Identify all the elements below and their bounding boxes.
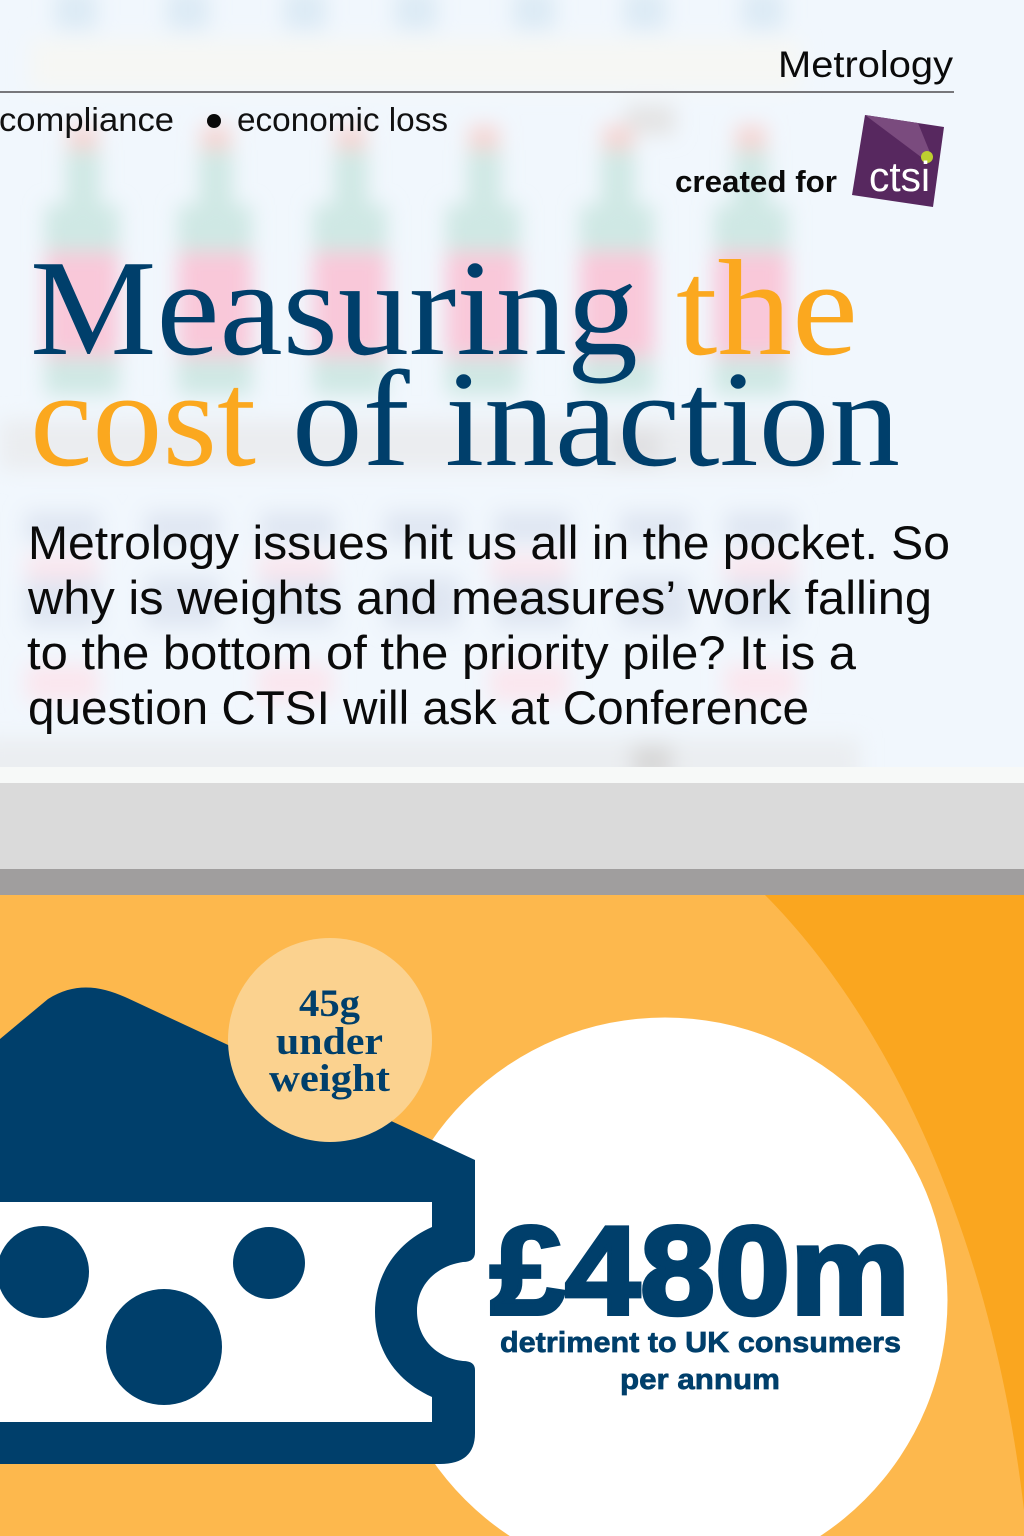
icon: CTSI logo [852, 115, 944, 207]
white separator band [0, 767, 1024, 783]
dark grey band [0, 869, 1024, 895]
created for label: created for [675, 164, 837, 199]
badge: 45g under weight: under [276, 1020, 383, 1063]
title: of inaction [292, 343, 900, 495]
intro paragraph [27, 516, 950, 734]
topic tag: compliance: compliance [0, 101, 174, 138]
badge: 45g under weight: weight [269, 1057, 390, 1100]
stat caption [500, 1327, 901, 1396]
header rule [0, 91, 954, 93]
title: cost [30, 343, 256, 495]
icon: cheese wedge [0, 987, 475, 1464]
stat caption: per annum [620, 1364, 780, 1396]
darker orange curved area [765, 895, 1024, 1510]
stat: £480m: £480m [490, 1200, 910, 1341]
title [30, 232, 900, 495]
badge: 45g under weight: 45g [299, 982, 361, 1025]
hero background: blurred bottles [0, 0, 855, 767]
title: the [676, 232, 858, 384]
icon: CTSI logo: ctsi [869, 153, 930, 200]
title: Measuring [30, 232, 638, 384]
intro paragraph: Metrology issues hit us all in the pocket. So [28, 516, 950, 569]
section label: Metrology: Metrology [778, 44, 954, 85]
topic tag: economic loss: economic loss [237, 101, 448, 138]
bullet [207, 114, 221, 128]
intro paragraph: to the bottom of the priority pile? It is a [27, 626, 857, 679]
white stat circle [382, 1018, 948, 1536]
stat caption: detriment to UK consumers [500, 1327, 901, 1359]
intro paragraph: question CTSI will ask at Conference [28, 681, 809, 734]
orange panel background [0, 895, 1024, 1536]
intro paragraph: why is weights and measures’ work falling [27, 571, 932, 624]
light grey band [0, 783, 1024, 869]
badge: 45g under weight [228, 938, 432, 1142]
